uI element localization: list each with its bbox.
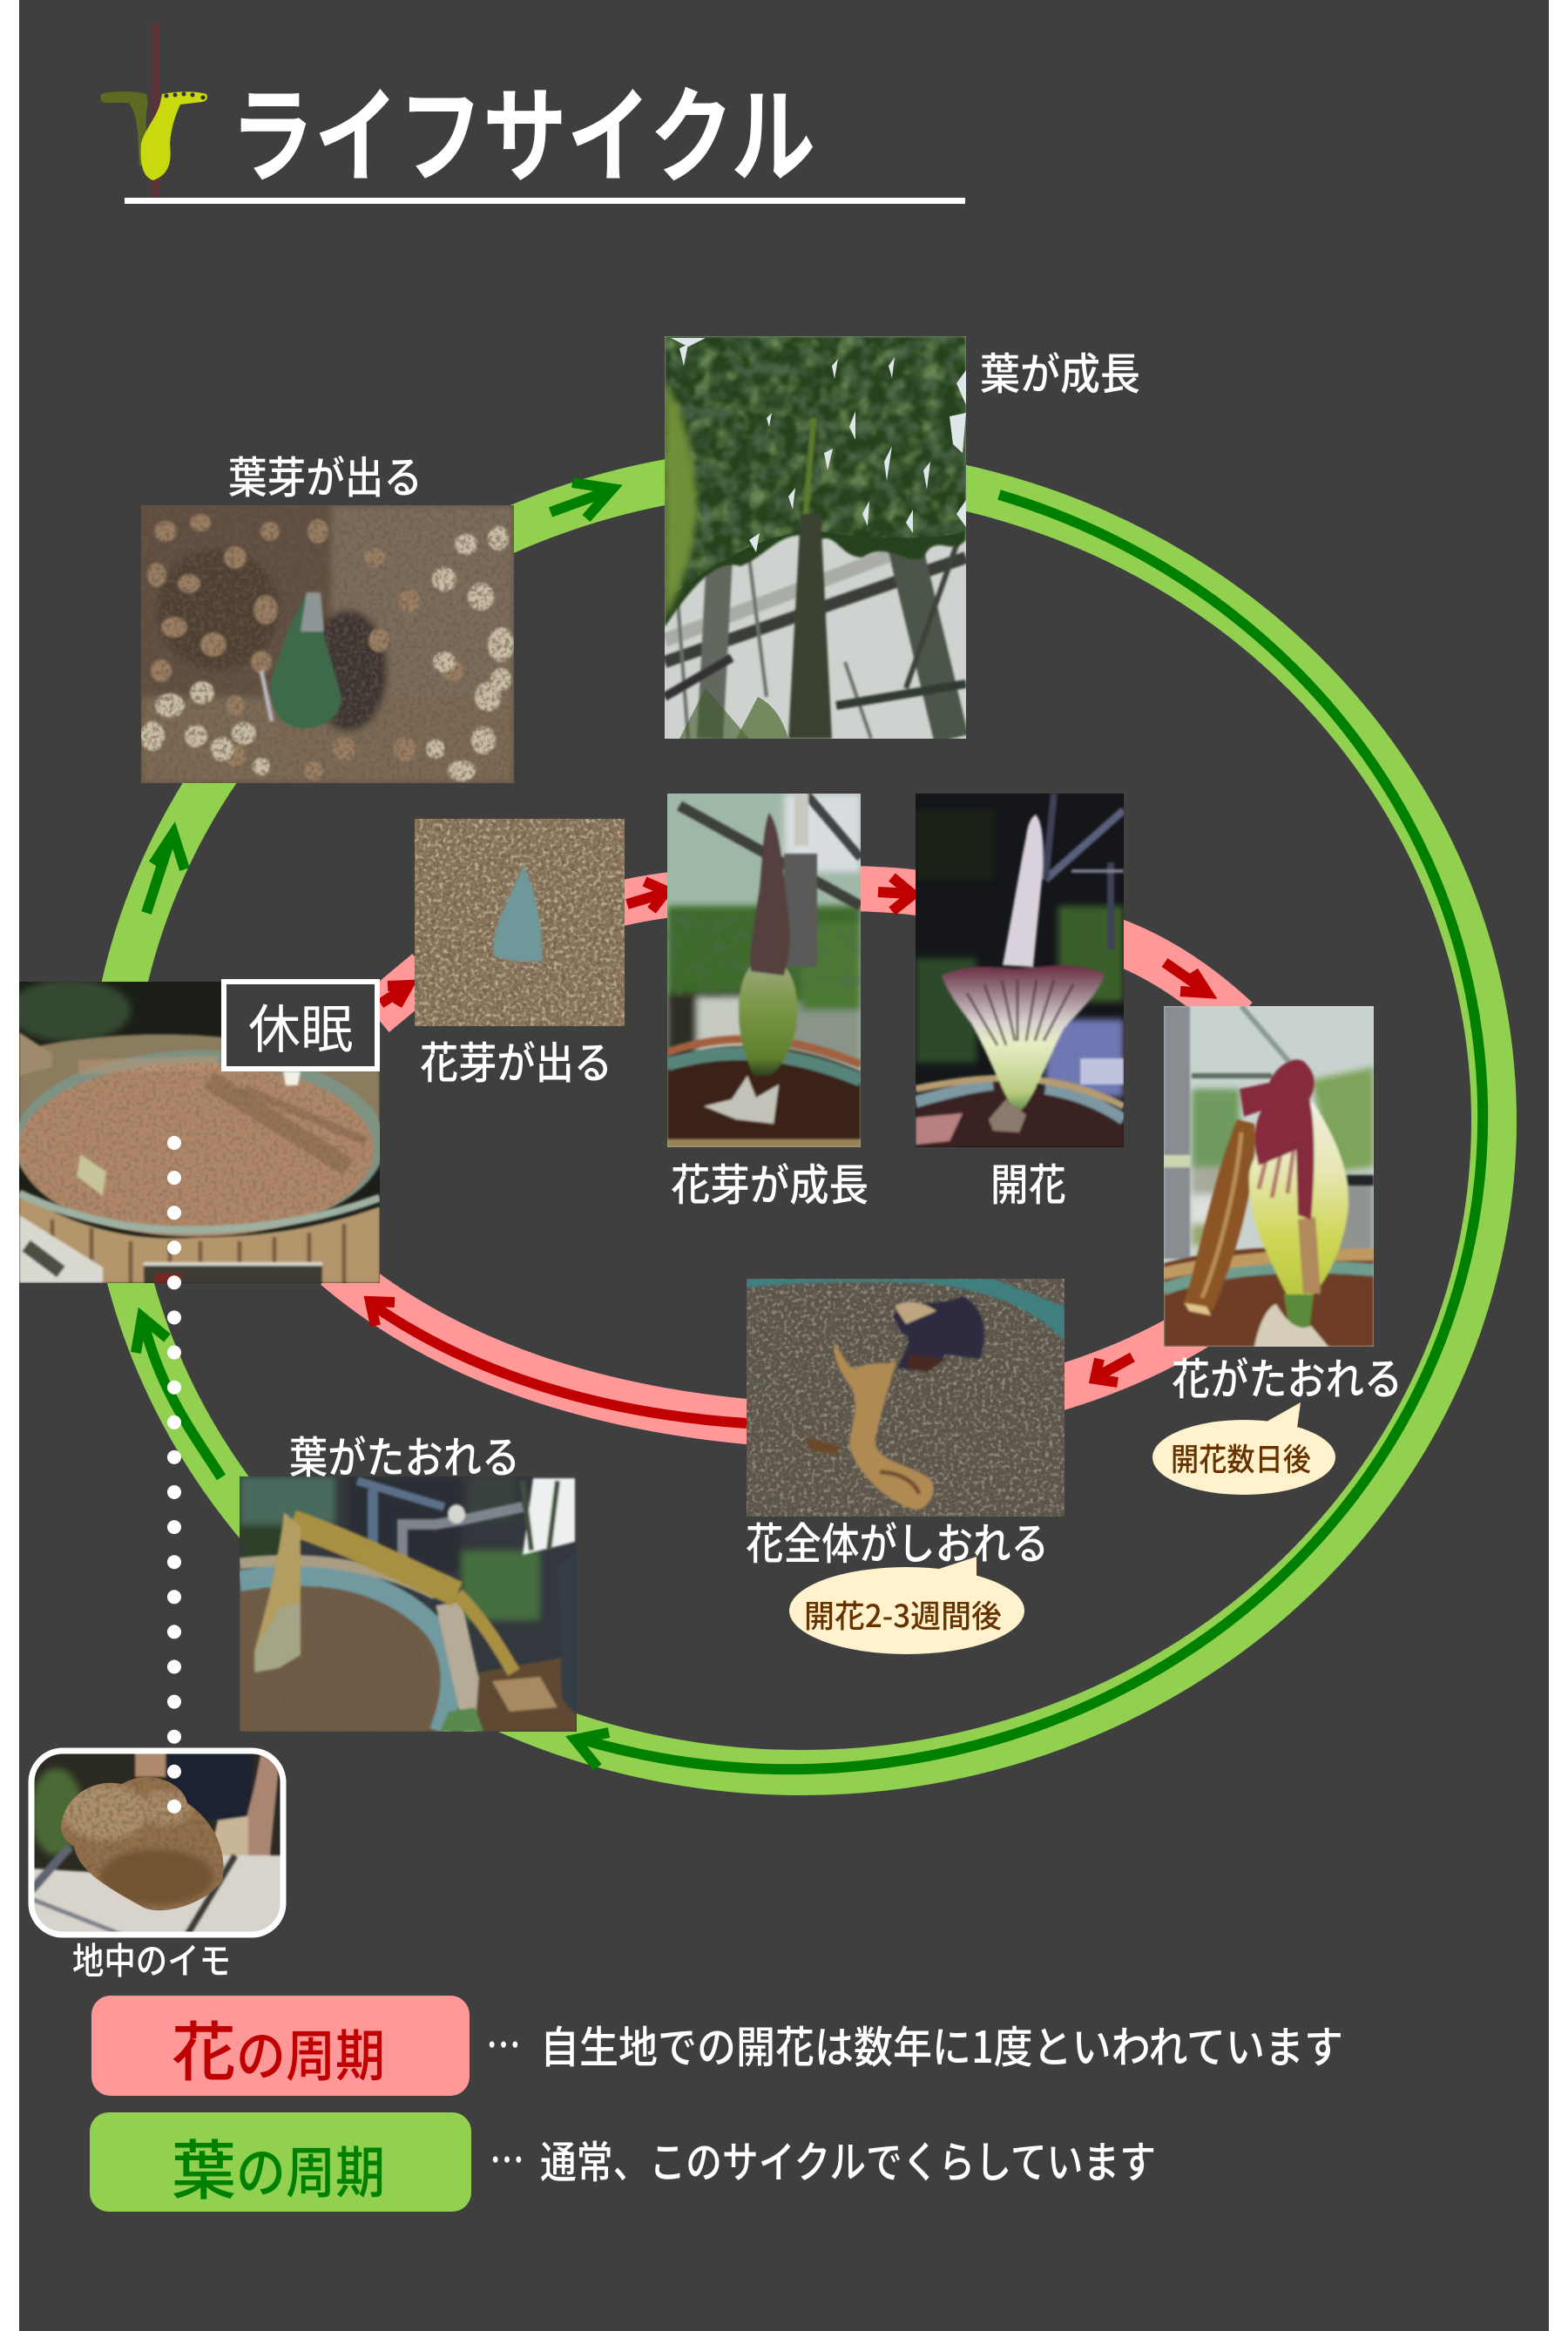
callout: weeks after flowering: 開花2-3週間後	[804, 1591, 1002, 1637]
dotted connector	[167, 1143, 181, 1808]
leaf cycle ring	[109, 470, 1494, 1773]
legend note: flower: 自生地での開花は数年に1度といわれています	[540, 2013, 1343, 2076]
photo: dormant bed	[19, 982, 380, 1283]
photo: leaf grown	[665, 336, 966, 739]
photo: leaf collapsed	[240, 1476, 577, 1732]
label: leaf collapses: 葉がたおれる	[289, 1423, 520, 1486]
maroon top	[1240, 1059, 1315, 1220]
dark petals	[893, 1296, 984, 1370]
spathe	[942, 965, 1105, 1115]
legend note: leaf: 通常、このサイクルでくらしています	[540, 2128, 1156, 2191]
label: flowering: 開花	[990, 1151, 1066, 1213]
base	[1284, 1294, 1314, 1328]
callout: weeks after flowering	[789, 1557, 1024, 1654]
legend note: leaf: …	[490, 2126, 524, 2189]
fallen spadix	[1183, 1119, 1255, 1311]
photo: underground tuber	[30, 1751, 283, 1935]
arrows: leaf cycle	[136, 483, 1483, 1769]
spathe	[1249, 1102, 1348, 1296]
spadix	[1003, 814, 1044, 967]
legend: leaf cycle: 葉	[172, 2119, 236, 2213]
legend: flower cycle: の周期	[236, 2012, 385, 2092]
title: ライフサイクル	[230, 52, 815, 204]
bud	[493, 865, 542, 962]
bud	[261, 592, 341, 728]
withered strand	[834, 1341, 933, 1510]
legend: flower cycle	[91, 1996, 470, 2096]
sleep label box: 休眠	[248, 988, 353, 1064]
label: leaf grown: 葉が成長	[980, 340, 1140, 402]
legend: leaf cycle	[90, 2112, 471, 2213]
legend: flower cycle: 花	[172, 2001, 236, 2094]
photo: flower bud growing	[667, 794, 861, 1147]
title underline	[125, 198, 965, 204]
legend note: flower: …	[486, 2011, 521, 2074]
label: tuber: 地中のイモ	[72, 1932, 231, 1985]
photo: flower collapsing	[1164, 1006, 1374, 1347]
spadix	[751, 813, 790, 976]
callout: days after flowering: 開花数日後	[1171, 1435, 1311, 1480]
legend: leaf cycle: の周期	[236, 2129, 385, 2209]
photo: open flower	[916, 794, 1124, 1147]
label: flower withers: 花全体がしおれる	[746, 1510, 1049, 1572]
sheath	[704, 1076, 779, 1124]
callout: days after flowering	[1152, 1402, 1335, 1495]
foliage	[665, 336, 966, 627]
photo: leaf bud emerging	[141, 505, 514, 783]
arrows: flower cycle	[370, 877, 1207, 1423]
label: flower bud: 花芽が出る	[420, 1029, 612, 1091]
label: flower collapses: 花がたおれる	[1172, 1345, 1402, 1408]
flower cycle band	[335, 888, 1237, 1423]
label: flower bud growing: 花芽が成長	[671, 1151, 868, 1213]
photo: flower bud emerging	[415, 819, 625, 1026]
stem	[788, 418, 832, 739]
photo: withered flower	[747, 1279, 1064, 1517]
icon: titan arum flower	[100, 24, 207, 198]
collapsed leaf stalk	[254, 1512, 514, 1672]
sleep label box	[224, 982, 377, 1069]
spathe	[739, 958, 797, 1076]
label: leaf bud: 葉芽が出る	[228, 443, 422, 506]
